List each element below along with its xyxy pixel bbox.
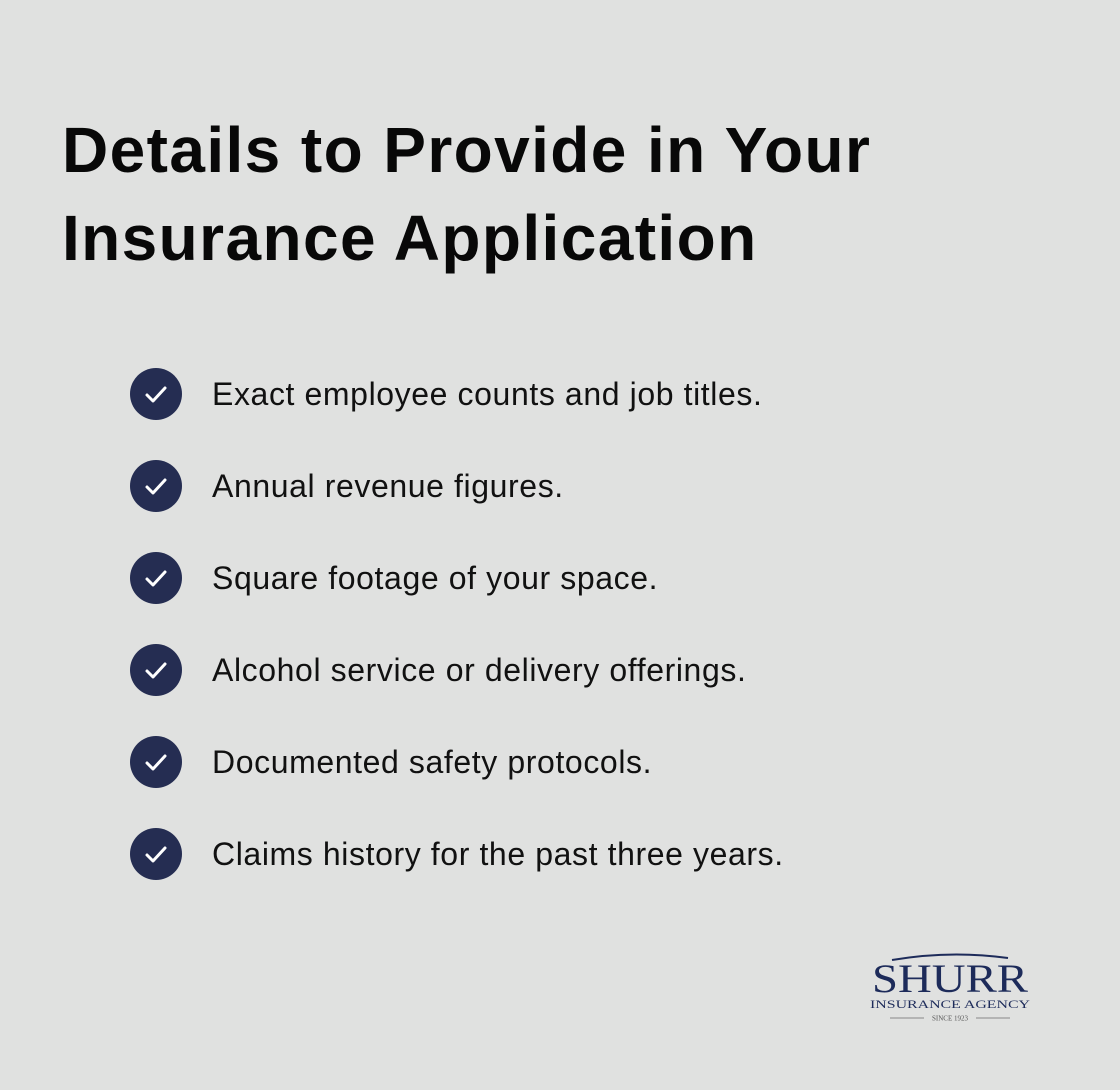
checklist	[130, 368, 784, 880]
item 2	[130, 460, 564, 512]
title: Details to Provide in Your	[62, 114, 871, 186]
item 6	[130, 828, 784, 880]
logo: SHURR	[872, 956, 1028, 1001]
item 5: Documented safety protocols.	[212, 744, 652, 780]
logo: SINCE 1923	[932, 1014, 968, 1022]
item 1	[130, 368, 762, 420]
item 5	[130, 736, 652, 788]
item 3	[130, 552, 658, 604]
title: Insurance Application	[62, 202, 758, 274]
item 4: Alcohol service or delivery offerings.	[212, 652, 746, 688]
item 1: Exact employee counts and job titles.	[212, 376, 762, 412]
title	[62, 114, 871, 274]
item 2: Annual revenue figures.	[212, 468, 564, 504]
logo: INSURANCE AGENCY	[870, 997, 1030, 1011]
item 4	[130, 644, 746, 696]
item 3: Square footage of your space.	[212, 560, 658, 596]
logo	[870, 954, 1030, 1022]
item 6: Claims history for the past three years.	[212, 836, 784, 872]
